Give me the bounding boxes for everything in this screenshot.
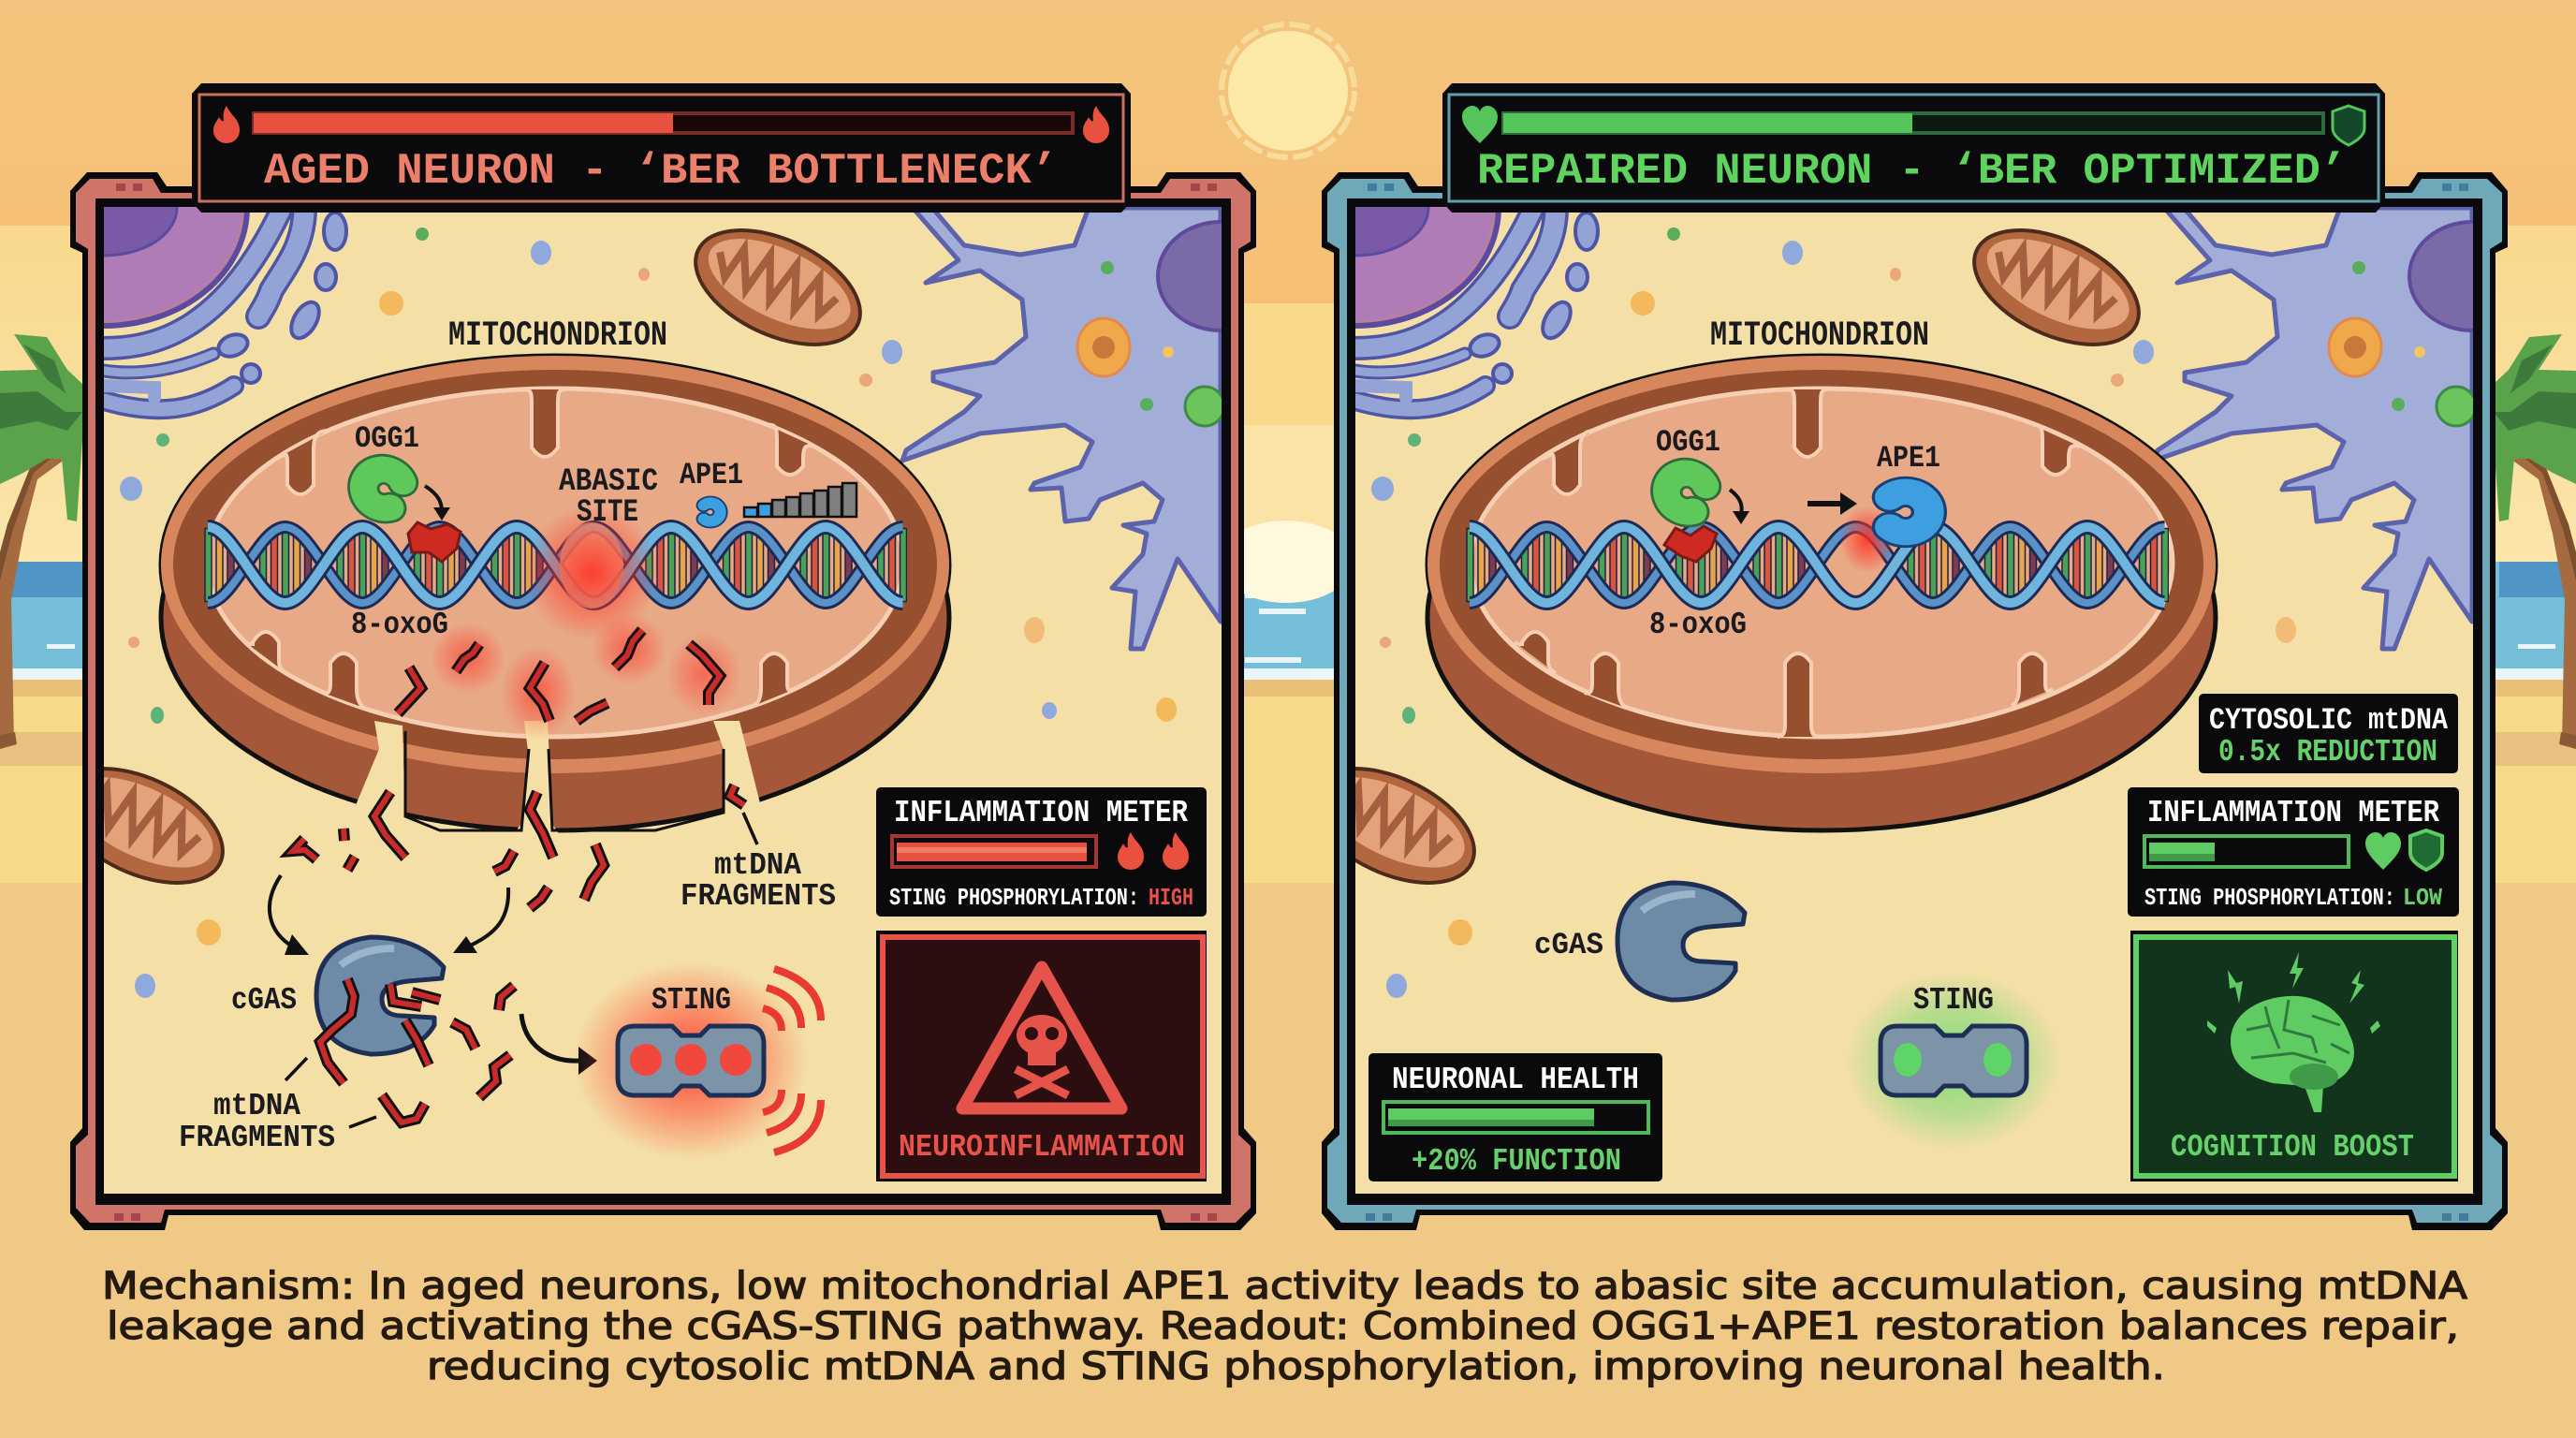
enzyme: OGG1 [1661,466,1707,516]
caption: mechanism and readout: leakage and activating the cGAS-STING pathway. Readout: Combined OGG1+APE1 restoration balances repair, [107,1305,2459,1348]
header: repaired neuron [1442,83,2385,213]
arrows: fragments to cGAS [270,875,508,947]
labels: cGAS and mtDNA fragments: FRAGMENTS [179,1121,335,1155]
leakage tears in the wall [337,721,777,838]
neuronal health meter: +20% FUNCTION [1412,1144,1621,1179]
enzyme: OGG1 [358,462,404,512]
label: abasic site: ABASIC [559,464,658,500]
STING activated [574,962,808,1159]
label: cGAS: cGAS [1534,928,1603,962]
neuroinflammation warning box: NEUROINFLAMMATION [899,1130,1185,1165]
cell background organelles: aged [104,207,1222,998]
inflammation meter: low [2128,787,2459,917]
label: OGG1: OGG1 [1656,425,1720,460]
abasic gap in the helix [560,522,623,609]
DNA helix: repaired [1444,527,2190,603]
caption: mechanism and readout: Mechanism: In aged neurons, low mitochondrial APE1 activity leads to abasic site accumulation, causing mtDNA [102,1265,2468,1308]
large mitochondrion, intact [1427,356,2216,830]
label: abasic site: SITE [577,495,638,531]
icon: brain with sparks [2207,952,2380,1112]
label: 8-oxoG: 8-oxoG [351,608,448,642]
header: aged neuron: AGED NEURON - ‘BER BOTTLENECK’ [264,147,1058,196]
DNA helix: aged [183,527,929,603]
inflammation meter: low: LOW [2403,884,2442,912]
inflammation meter: high: INFLAMMATION METER [894,796,1188,830]
labels: cGAS and mtDNA fragments: mtDNA [714,848,801,883]
panel frame: repaired [1322,172,2508,1230]
inflammation meter: low: STING PHOSPHORYLATION: [2144,884,2395,912]
cognition boost box: COGNITION BOOST [2171,1130,2414,1165]
label: mitochondrion: MITOCHONDRION [448,316,667,356]
neuroinflammation warning box [876,931,1207,1181]
repair site glow [1839,506,1895,573]
callout: cytosolic mtDNA [2199,694,2458,773]
label: APE1: APE1 [1877,441,1940,476]
labels: cGAS and mtDNA fragments: FRAGMENTS [681,879,836,914]
inflammation meter: low: INFLAMMATION METER [2147,796,2439,830]
cGAS enzyme activated [316,937,444,1054]
large mitochondrion, damaged [161,356,949,838]
caption: mechanism and readout: reducing cytosolic mtDNA and STING phosphorylation, improving neuronal health. [427,1345,2165,1388]
abasic site glow [524,506,659,640]
inflammation meter: high: STING PHOSPHORYLATION: [889,884,1139,912]
panel: aged neuron [0,83,1283,1230]
enzyme: APE1 low [704,503,721,521]
label: STING: STING [1913,983,1994,1018]
arrow: OGG1 to lesion [1730,490,1749,524]
cognition boost box [2130,931,2458,1181]
APE1 low activity staircase [744,483,856,517]
header: repaired neuron: REPAIRED NEURON - ‘BER OPTIMIZED’ [1477,147,2347,196]
labels: cGAS and mtDNA fragments: cGAS [231,983,297,1018]
lesion: 8-oxoG [408,522,461,562]
labels: cGAS and mtDNA fragments [179,813,836,1155]
callout: cytosolic mtDNA: 0.5x REDUCTION [2218,735,2437,770]
enzyme: APE1 restored [1890,492,1929,533]
arrow: toward APE1 [1808,492,1857,515]
label: 8-oxoG: 8-oxoG [1649,608,1747,642]
signal waves [763,969,821,1152]
label: mitochondrion: MITOCHONDRION [1710,316,1929,356]
sun [1222,24,1354,157]
label: STING: STING [651,983,731,1018]
labels: cGAS and mtDNA fragments: mtDNA [213,1089,300,1123]
inflammation meter: high [876,787,1207,917]
lesion: 8-oxoG [1664,526,1717,562]
mtDNA fragments [293,630,744,1123]
palm tree right [2494,334,2576,749]
inflammation meter: high: HIGH [1149,884,1193,912]
panel: repaired neuron [1322,83,2508,1230]
STING quiet [1846,972,2061,1150]
arrow heads to cGAS [285,934,477,955]
label: abasic site [559,464,658,531]
cGAS enzyme inactive [1617,883,1745,1000]
palm tree left [0,334,82,749]
arrow: OGG1 to lesion [425,486,450,521]
caption: mechanism and readout [102,1265,2468,1388]
icon: warning triangle with skull [962,967,1121,1108]
header: aged neuron [192,83,1131,213]
neuronal health meter: NEURONAL HEALTH [1392,1063,1639,1097]
arrow: cGAS to STING [521,1014,597,1075]
label: APE1: APE1 [680,458,743,492]
red glows around leaking fragments [431,613,741,740]
panel frame: aged [70,172,1256,1230]
cloud on the horizon [1219,521,1354,603]
neuronal health meter [1368,1053,1662,1181]
cell background organelles: repaired [1355,207,2473,998]
label: OGG1: OGG1 [355,421,419,456]
callout: cytosolic mtDNA: CYTOSOLIC mtDNA [2209,703,2449,738]
